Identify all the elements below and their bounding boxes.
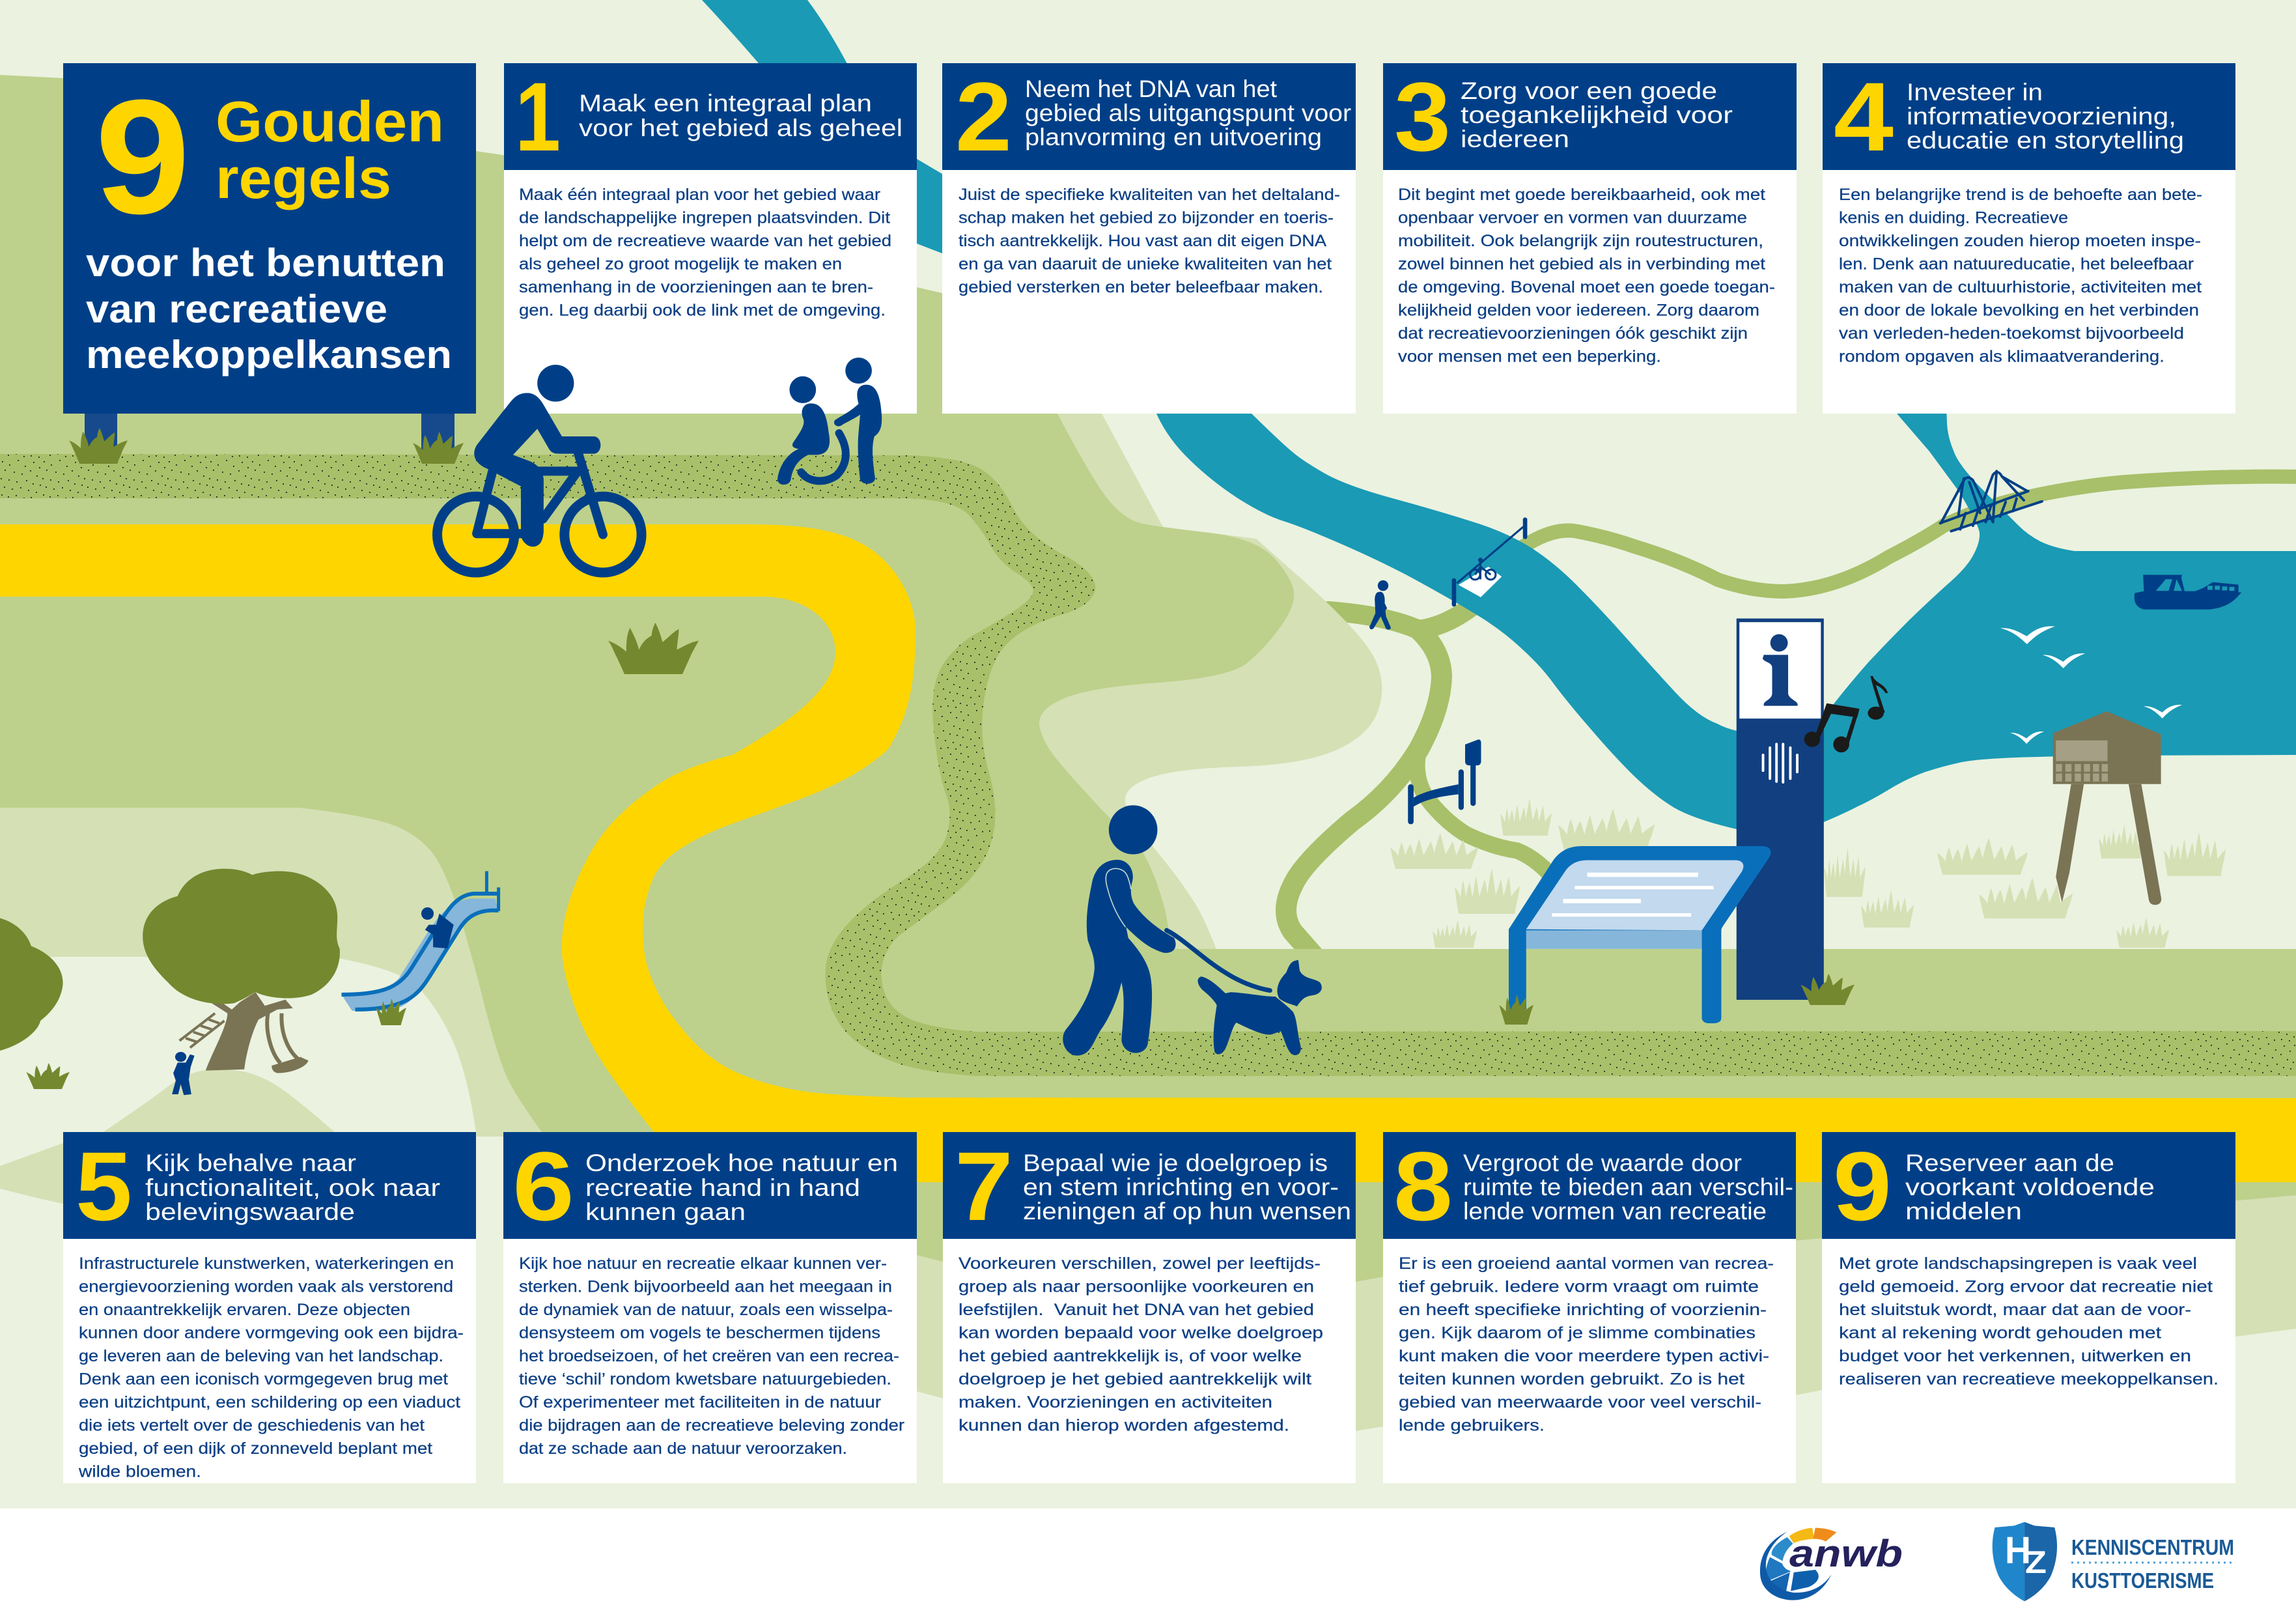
heading 4: Investeer in — [1907, 79, 2043, 106]
ladder — [180, 1014, 300, 1063]
leash — [1167, 930, 1270, 991]
body 5 — [78, 1255, 464, 1481]
heading 1: voor het gebied als geheel — [579, 115, 903, 141]
body 7: leefstijlen. Vanuit het DNA van het gebied — [959, 1301, 1314, 1319]
card 2 — [942, 62, 1356, 414]
body 5: en onaantrekkelijk ervaren. Deze objecten — [79, 1301, 410, 1319]
icon: wheelchair user and helper — [777, 358, 882, 485]
body 7: het gebied aantrekkelijk is, of voor welke — [959, 1347, 1302, 1365]
body 2: gebied versterken en beter beleefbaar maken. — [959, 278, 1323, 296]
lower left pale area — [0, 957, 477, 1137]
body 4: ontwikkelingen zouden hierop moeten inspe- — [1839, 232, 2201, 250]
logo: HZ Kenniscentrum Kusttoerisme: H — [2005, 1529, 2031, 1572]
grass at pole — [1800, 974, 1855, 1005]
body 8: gen. Kijk daarom of je slimme combinaties — [1399, 1324, 1756, 1342]
logo: ANWB — [1760, 1528, 1903, 1600]
body 7: groep als naar persoonlijke voorkeuren en — [959, 1278, 1314, 1296]
body 1: als geheel zo groot mogelijk te maken en — [519, 255, 842, 274]
body 5: Denk aan een iconisch vormgegeven brug met — [79, 1370, 448, 1389]
body 6: Of experimenteer met faciliteiten in de natuur — [519, 1393, 881, 1411]
body 8: teiten kunnen worden gebruikt. Zo is het — [1399, 1370, 1744, 1389]
body 7 — [959, 1255, 1323, 1434]
heading: Gouden regels — [216, 89, 444, 210]
heading 5: Kijk behalve naar — [145, 1150, 356, 1176]
body 5: die iets vertelt over de geschiedenis van het — [79, 1416, 425, 1434]
body 7: Voorkeuren verschillen, zowel per leeftijds- — [959, 1255, 1321, 1273]
heading 6: kunnen gaan — [585, 1198, 746, 1225]
subheading — [86, 241, 452, 376]
lower right mid green band — [912, 1166, 2296, 1282]
number 1: 1 — [515, 62, 561, 171]
card 4 — [1823, 62, 2235, 414]
body 5: wilde bloemen. — [78, 1463, 201, 1481]
icon: information board — [1509, 846, 1771, 1023]
heading 4: informatievoorziening, — [1907, 103, 2176, 130]
icon: bench and sign — [1408, 739, 1481, 824]
card 8 — [1383, 1131, 1796, 1483]
body 6 — [519, 1255, 904, 1458]
heading 3: iedereen — [1461, 126, 1569, 152]
body 9: geld gemoeid. Zorg ervoor dat recreatie niet — [1839, 1278, 2213, 1296]
number 5: 5 — [76, 1131, 132, 1241]
sound wave — [1763, 744, 1797, 782]
logo: HZ Kenniscentrum Kusttoerisme — [1993, 1522, 2234, 1601]
body 9: Met grote landschapsingrepen is vaak veel — [1839, 1255, 2197, 1273]
icon: birds — [2000, 626, 2182, 744]
body 9: budget voor het verkennen, uitwerken en — [1839, 1347, 2191, 1365]
number 4: 4 — [1834, 62, 1894, 171]
card 3 — [1383, 62, 1797, 414]
card 9 — [1822, 1131, 2235, 1483]
bike frame — [438, 451, 641, 573]
body 5: kunnen door andere vormgeving ook een bijdra- — [79, 1324, 464, 1342]
heading 8 — [1463, 1150, 1793, 1225]
heading 6: Onderzoek hoe natuur en — [585, 1150, 898, 1176]
heading 2 — [1025, 76, 1351, 150]
number 8: 8 — [1393, 1131, 1453, 1241]
body 1: Maak één integraal plan voor het gebied waar — [519, 186, 880, 204]
winding footpaths — [1286, 477, 2296, 957]
body 3: voor mensen met een beperking. — [1398, 348, 1661, 366]
heading 9: Reserveer aan de — [1905, 1150, 2114, 1176]
heading 6: recreatie hand in hand — [585, 1174, 860, 1201]
heading 8: lende vormen van recreatie — [1463, 1198, 1767, 1225]
body 2 — [959, 186, 1340, 296]
lower left light area — [0, 808, 545, 1137]
heading 2: planvorming en uitvoering — [1025, 124, 1322, 150]
body 4 — [1839, 186, 2202, 366]
number 3: 3 — [1394, 62, 1451, 171]
dotted gravel path — [0, 454, 2296, 1076]
heading 3 — [1461, 78, 1733, 152]
trunk — [206, 992, 293, 1071]
river — [702, 0, 1758, 830]
body 1: helpt om de recreatieve waarde van het gebied — [519, 232, 891, 250]
heading 6 — [585, 1150, 898, 1225]
poles — [1452, 578, 1456, 606]
heading 4: educatie en storytelling — [1907, 127, 2184, 154]
body 1: de landschappelijke ingrepen plaatsvinden. Dit — [519, 208, 890, 227]
grass at board — [1499, 995, 1533, 1025]
heading 9: middelen — [1905, 1198, 2022, 1225]
head — [537, 365, 574, 402]
body 1 — [519, 186, 891, 319]
subheading: meekoppelkansen — [86, 333, 452, 376]
body 8: Er is een groeiend aantal vormen van recrea- — [1399, 1255, 1774, 1273]
heading 2: gebied als uitgangspunt voor — [1025, 100, 1351, 126]
body 5: Infrastructurele kunstwerken, waterkeringen en — [79, 1255, 454, 1273]
body 2: en ga van daaruit de unieke kwaliteiten van het — [959, 255, 1332, 274]
crown — [143, 869, 340, 1004]
body 3: dat recreatievoorzieningen óók geschikt zijn — [1398, 324, 1748, 343]
number 2: 2 — [955, 62, 1012, 171]
body 9: realiseren van recreatieve meekoppelkansen. — [1839, 1370, 2219, 1389]
pale grass clumps — [1390, 799, 2226, 948]
number 9: 9 — [1833, 1131, 1892, 1241]
card 6 — [503, 1131, 917, 1483]
body 3 — [1398, 186, 1775, 366]
icon: tree with ladder and swing — [0, 869, 499, 1095]
heading 7: Bepaal wie je doelgroep is — [1023, 1150, 1328, 1176]
body 2: schap maken het gebied zo bijzonder en toeris- — [959, 208, 1334, 227]
heading 5: belevingswaarde — [145, 1198, 355, 1225]
body 4: van verleden-heden-toekomst bijvoorbeeld — [1839, 324, 2184, 343]
icon: suspension bridge — [1940, 471, 2042, 532]
olive grass clump centre — [608, 623, 699, 674]
heading 9: voorkant voldoende — [1905, 1174, 2155, 1200]
body 2: Juist de specifieke kwaliteiten van het deltaland- — [959, 186, 1340, 204]
icon: information pole — [1737, 619, 1888, 1000]
music notes — [1804, 676, 1888, 752]
body 8: gebied van meerwaarde voor veel verschil- — [1399, 1393, 1761, 1411]
icon: small walker — [1369, 580, 1391, 630]
icon: child by tree — [172, 1052, 195, 1095]
body 8: lende gebruikers. — [1399, 1416, 1545, 1434]
card 5 — [63, 1131, 476, 1483]
number 6: 6 — [512, 1131, 574, 1241]
small hill — [96, 1070, 340, 1137]
cable — [1457, 527, 1523, 584]
body 9 — [1839, 1255, 2219, 1389]
body 3: Dit begint met goede bereikbaarheid, ook met — [1398, 186, 1765, 204]
card 7 — [943, 1131, 1356, 1483]
icon: tree at left edge — [0, 918, 63, 1051]
heading 3: Zorg voor een goede — [1461, 78, 1717, 104]
body 9: het sluitstuk wordt, maar dat aan de voor- — [1839, 1301, 2191, 1319]
body 6: densysteem om vogels te beschermen tijdens — [519, 1324, 880, 1342]
body 6: dat ze schade aan de natuur veroorzaken. — [519, 1439, 847, 1458]
grass at sign posts — [69, 428, 464, 464]
head — [1109, 805, 1157, 855]
logo: ANWB: anwb — [1789, 1533, 1903, 1575]
yellow road — [0, 524, 2296, 1182]
body 2: tisch aantrekkelijk. Hou vast aan dit eigen DNA — [959, 232, 1326, 250]
body 7: maken. Voorzieningen en activiteiten — [959, 1393, 1272, 1411]
heading 1: Maak een integraal plan — [579, 90, 872, 117]
icon: boat — [2135, 575, 2241, 610]
body 3: mobiliteit. Ook belangrijk zijn routestructuren, — [1398, 232, 1763, 250]
body 9: kant al rekening wordt gehouden met — [1839, 1324, 2161, 1342]
heading 7: en stem inrichting en voor- — [1023, 1174, 1339, 1200]
heading 8: Vergroot de waarde door — [1463, 1150, 1742, 1176]
light green lobe — [977, 414, 1382, 951]
lower right light band — [912, 1166, 2296, 1431]
icon: person walking dog — [1063, 805, 1322, 1056]
raft — [1459, 567, 1502, 597]
body 3: kelijkheid gelden voor iedereen. Zorg daarom — [1398, 301, 1759, 319]
body 6: tieve ‘schil’ rondom kwetsbare natuurgebieden. — [519, 1370, 891, 1389]
body 6: sterken. Denk bijvoorbeeld aan het meegaan in — [519, 1278, 892, 1296]
body 4: Een belangrijke trend is de behoefte aan bete- — [1839, 186, 2202, 204]
body 7: kan worden bepaald voor welke doelgroep — [959, 1324, 1323, 1342]
heading 7: zieningen af op hun wensen — [1023, 1198, 1351, 1225]
heading 8: ruimte te bieden aan verschil- — [1463, 1174, 1793, 1200]
icon: ferry and bridge — [1369, 517, 1527, 824]
body 8: en heeft specifieke inrichting of voorzienin- — [1399, 1301, 1767, 1319]
heading: Gouden regels: Gouden — [216, 89, 444, 154]
body 1: samenhang in de voorzieningen aan te bren- — [519, 278, 873, 296]
card 1 — [504, 62, 917, 414]
icon: child on slide — [421, 907, 454, 948]
heading 1 — [579, 90, 903, 141]
body 8: kunt maken die voor meerdere typen activi- — [1399, 1347, 1769, 1365]
title panel — [63, 63, 476, 464]
small cyclist — [1470, 560, 1496, 580]
sign posts — [85, 410, 455, 456]
body 3: de omgeving. Bovenal moet een goede toegan- — [1398, 278, 1775, 296]
body — [1063, 860, 1176, 1056]
body 4: rondom opgaven als klimaatverandering. — [1839, 348, 2164, 366]
body 6: de dynamiek van de natuur, zoals een wisselpa- — [519, 1301, 893, 1319]
big nine: 9 — [95, 66, 190, 248]
mid green hill and ground — [0, 75, 2296, 1182]
body 6: het broedseizoen, of het creëren van een recrea- — [519, 1347, 899, 1365]
body 1: gen. Leg daarbij ook de link met de omgeving. — [519, 301, 886, 319]
heading 3: toegankelijkheid voor — [1461, 102, 1733, 128]
body 8 — [1399, 1255, 1774, 1434]
body 5: energievoorziening worden vaak als verstorend — [79, 1278, 453, 1296]
heading 5: functionaliteit, ook naar — [145, 1174, 440, 1201]
heading 2: Neem het DNA van het — [1025, 76, 1278, 102]
info letter — [1763, 634, 1798, 706]
body 5: een uitzichtpunt, een schildering op een viaduct — [79, 1393, 460, 1411]
body 4: kenis en duiding. Recreatieve — [1839, 208, 2068, 227]
heading 4 — [1907, 79, 2184, 154]
body 7: doelgroep je het gebied aantrekkelijk wilt — [959, 1370, 1311, 1389]
body 6: Kijk hoe natuur en recreatie elkaar kunnen ver- — [519, 1255, 887, 1273]
lake — [1797, 404, 2296, 834]
dog — [1197, 976, 1301, 1055]
number 7: 7 — [955, 1131, 1013, 1241]
heading 9 — [1905, 1150, 2155, 1225]
icon: slide — [341, 899, 499, 1011]
body 4: len. Denk aan natuureducatie, het beleefbaar — [1839, 255, 2194, 274]
subheading: voor het benutten — [86, 241, 445, 285]
logo: HZ Kenniscentrum Kusttoerisme: KUSTTOERISME — [2071, 1568, 2214, 1593]
heading 7 — [1023, 1150, 1351, 1225]
body 3: openbaar vervoer en vormen van duurzame — [1398, 208, 1747, 227]
arm highlight — [1106, 868, 1131, 927]
subheading: van recreatieve — [86, 287, 387, 331]
body 7: kunnen dan hierop worden afgestemd. — [959, 1416, 1289, 1434]
body 6: die bijdragen aan de recreatieve beleving zonder — [519, 1416, 904, 1434]
body 5: ge leveren aan de beleving van het landschap. — [79, 1347, 443, 1365]
body 4: en door de lokale bevolking en het verbinden — [1839, 301, 2199, 319]
icon: cyclist — [438, 365, 641, 573]
body 5: gebied, of een dijk of zonneveld beplant met — [79, 1439, 432, 1458]
swing seat — [272, 1057, 309, 1073]
body 3: zowel binnen het gebied als in verbinding met — [1398, 255, 1765, 274]
body 8: tief gebruik. Iedere vorm vraagt om ruimte — [1399, 1278, 1759, 1296]
logo: HZ Kenniscentrum Kusttoerisme: KENNISCENTRUM — [2071, 1535, 2234, 1559]
footer — [0, 1509, 2296, 1616]
body 4: maken van de cultuurhistorie, activiteiten met — [1839, 278, 2202, 296]
icon: bird hide on stilts — [2053, 711, 2161, 905]
body — [474, 393, 600, 546]
heading: Gouden regels: regels — [216, 146, 391, 210]
heading 5 — [145, 1150, 440, 1225]
olive grass clumps — [26, 999, 406, 1089]
logo: HZ Kenniscentrum Kusttoerisme: Z — [2025, 1546, 2047, 1580]
